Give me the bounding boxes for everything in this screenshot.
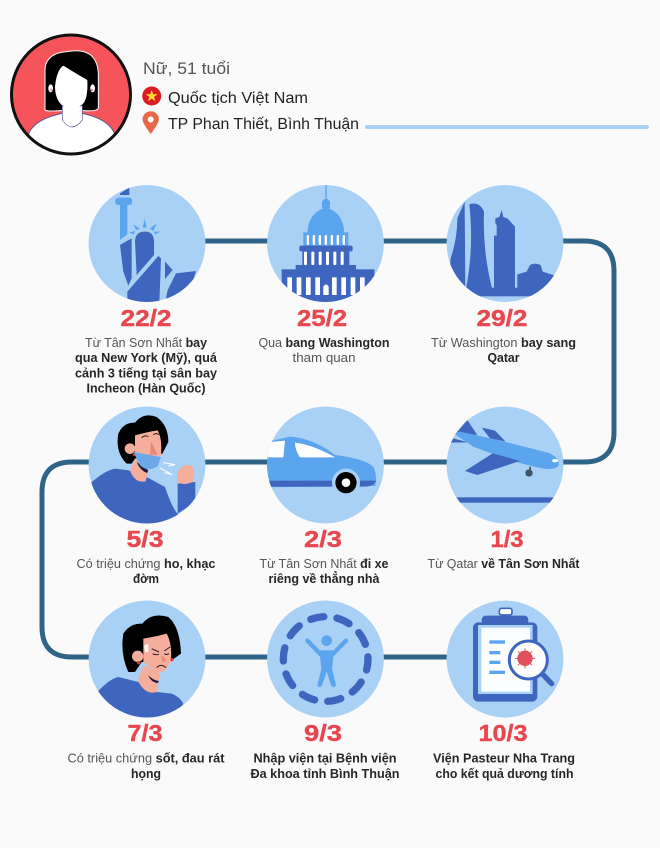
description: Viện Pasteur Nha Trang xyxy=(433,752,575,766)
location: TP Phan Thiết, Bình Thuận xyxy=(168,116,359,133)
description xyxy=(433,752,575,781)
description: cảnh 3 tiếng tại sân bay xyxy=(75,366,217,380)
icon: Vietnam flag xyxy=(142,86,161,106)
icon: capitol xyxy=(267,185,384,303)
description: Incheon (Hàn Quốc) xyxy=(86,382,206,396)
description: Có triệu chứng sốt, đau rát xyxy=(68,752,225,766)
avatar xyxy=(13,36,129,134)
step: 1/3 xyxy=(428,406,580,571)
header rule xyxy=(367,125,647,129)
step: 29/2 xyxy=(431,185,576,365)
description xyxy=(76,557,215,586)
date: 22/2 xyxy=(120,305,172,331)
description xyxy=(250,752,400,781)
nationality: Quốc tịch Việt Nam xyxy=(168,90,308,107)
date: 10/3 xyxy=(478,720,528,746)
step: 25/2 xyxy=(258,185,390,365)
description: qua New York (Mỹ), quá xyxy=(75,351,218,365)
description: Có triệu chứng ho, khạc xyxy=(76,557,215,571)
description: Từ Tân Sơn Nhất bay xyxy=(85,336,207,350)
description: riêng về thẳng nhà xyxy=(268,571,380,586)
step: 22/2 xyxy=(75,185,218,396)
patient header xyxy=(11,34,647,157)
description: Từ Qatar về Tân Sơn Nhất xyxy=(428,557,580,571)
description: đờm xyxy=(133,572,159,586)
description xyxy=(68,752,225,781)
step: 7/3 xyxy=(68,600,225,781)
icon: clipboard with virus xyxy=(446,600,564,718)
date: 25/2 xyxy=(297,305,347,331)
icon: Qatar skyline xyxy=(446,185,564,302)
icon: coughing person xyxy=(88,406,206,529)
timeline connector xyxy=(42,241,614,657)
description: cho kết quả dương tính xyxy=(436,767,574,781)
step: 2/3 xyxy=(260,406,388,586)
icon: feverish person xyxy=(88,600,206,720)
icon: car xyxy=(263,406,384,524)
date: 9/3 xyxy=(304,720,342,746)
date: 2/3 xyxy=(304,526,342,552)
step: 9/3 xyxy=(250,600,400,781)
description: Nhập viện tại Bệnh viện xyxy=(254,752,396,766)
description xyxy=(258,336,390,365)
icon: location pin xyxy=(142,111,159,134)
description: Qatar xyxy=(488,351,520,365)
description: Từ Tân Sơn Nhất đi xe xyxy=(260,557,388,571)
step: 5/3 xyxy=(76,406,215,586)
date: 1/3 xyxy=(490,526,524,552)
description xyxy=(260,557,388,586)
date: 29/2 xyxy=(476,305,528,331)
date: 7/3 xyxy=(128,720,162,746)
description: Từ Washington bay sang xyxy=(431,336,576,350)
icon: isolated person xyxy=(267,600,384,718)
description: tham quan xyxy=(292,351,356,365)
description xyxy=(431,336,576,365)
description xyxy=(75,336,218,396)
description: họng xyxy=(131,767,161,781)
date: 5/3 xyxy=(126,526,164,552)
icon: landing plane xyxy=(446,406,564,524)
step: 10/3 xyxy=(433,600,575,781)
description: Đa khoa tỉnh Bình Thuận xyxy=(250,767,400,781)
icon: statue of liberty xyxy=(88,185,206,303)
gender and age: Nữ, 51 tuổi xyxy=(143,60,230,78)
description: Qua bang Washington xyxy=(258,336,390,350)
